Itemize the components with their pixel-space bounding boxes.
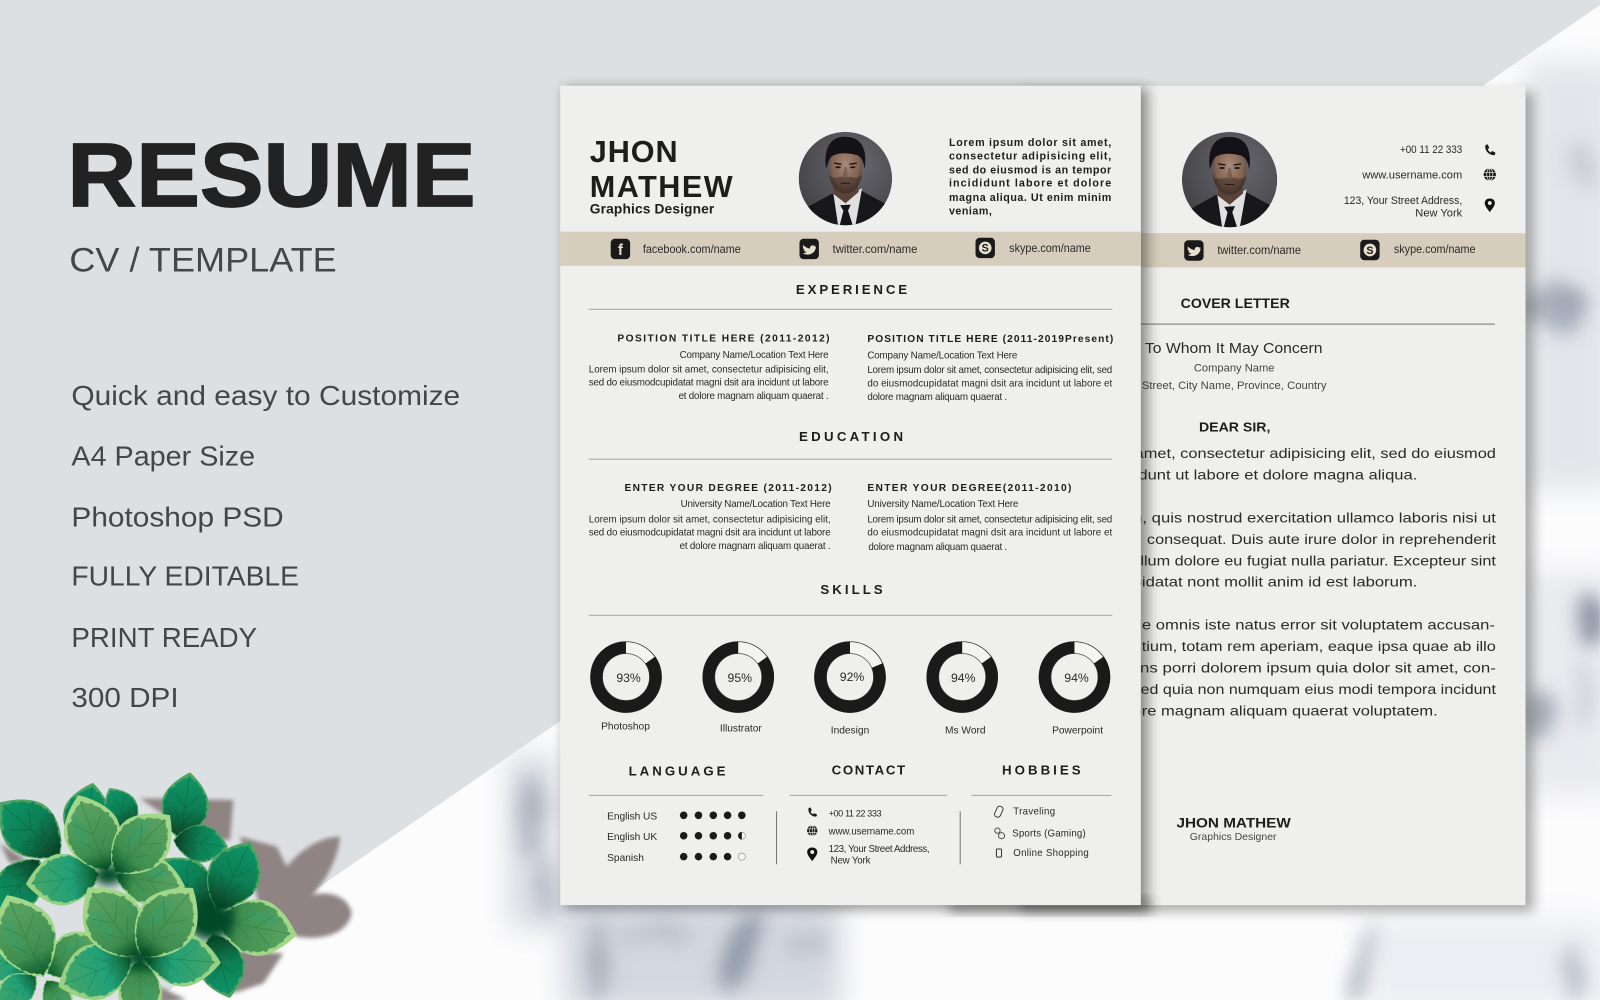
education left: Lorem ipsum dolor sit amet, consectetur adipisicing elit, (589, 514, 831, 525)
recipient: To Whom It May Concern (1145, 341, 1322, 357)
letter paragraph 3: ntium, totam rem aperiam, eaque ipsa quae ab illo (1133, 639, 1496, 655)
experience right: do eiusmodcupidatat magni dsit ara incidunt ut labore et (867, 379, 1113, 390)
experience left: sed do eiusmodcupidatat magni dsit ara incidunt ut labore (589, 378, 829, 389)
chart: ms word 94% (921, 636, 1003, 737)
portrait: resume (795, 132, 895, 229)
education right: Lorem ipsum dolor sit amet, consectetur adipisicing elit, sed (867, 514, 1112, 525)
feature: dpi: 300 DPI (71, 682, 179, 713)
hobby: traveling: Traveling (1013, 806, 1055, 817)
leaf: back right (171, 821, 230, 866)
education right: dolore magnam aliquam quaerat . (868, 542, 1007, 553)
resume sheet (560, 86, 1141, 905)
contact address (829, 844, 930, 866)
letter paragraph 1: idunt ut labore et dolore magna aliqua. (1135, 468, 1417, 484)
icon: skype (976, 238, 995, 258)
contact address: New York (1415, 207, 1463, 219)
education left: ENTER YOUR DEGREE (2011-2012) (624, 483, 832, 494)
feature: print ready: PRINT READY (71, 622, 257, 653)
experience right (867, 334, 1113, 403)
letter paragraph 1 (1135, 446, 1496, 484)
feature: customize: Quick and easy to Customize (71, 380, 460, 411)
contact address: 123, Your Street Address, (1344, 195, 1462, 207)
leaf: top cluster lower right (111, 851, 189, 911)
letter paragraph 2 (1129, 510, 1496, 591)
name (590, 135, 733, 204)
leaf: right cluster upper left (143, 841, 231, 928)
contact phone: +00 11 22 333 (1400, 144, 1462, 156)
top cluster centre shade (94, 865, 122, 885)
plant shadow (0, 798, 352, 1000)
letter paragraph 2: m, quis nostrud exercitation ullamco laboris nisi ut (1129, 510, 1496, 526)
experience right: Company Name/Location Text Here (867, 351, 1017, 362)
leaf: lower left cluster right (34, 918, 115, 993)
chart: ms word 94%: Ms Word (945, 726, 986, 737)
leaf: bottom cluster right (141, 930, 223, 989)
leaf: right cluster up (193, 830, 274, 922)
chart: illustrator 95% (697, 636, 779, 735)
heading: hobbies: HOBBIES (1002, 762, 1081, 777)
icon: facebook (611, 239, 630, 259)
letter paragraph 3: ons porri dolorem ipsum quia dolor sit amet, con- (1131, 660, 1496, 676)
icon: phone (1485, 144, 1495, 155)
leaf: back top (157, 769, 213, 844)
chart: photoshop 93%: Photoshop (601, 722, 650, 733)
bio: Lorem ipsum dolor sit amet, (949, 137, 1111, 149)
leaf: right cluster right (212, 892, 302, 963)
icon: phone (808, 807, 817, 817)
leaf: bottom cluster left (48, 931, 144, 1000)
language: spanish (607, 853, 745, 864)
leaf: lower left cluster up (0, 883, 72, 989)
leaf: lower left cluster down (34, 973, 81, 1000)
twitter handle: twitter.com/name (833, 243, 917, 256)
name: JHON (590, 135, 678, 169)
letter paragraph 3: de omnis iste natus error sit voluptatem accusan- (1133, 618, 1495, 634)
title: RESUME (67, 126, 476, 226)
experience left: et dolore magnam aliquam quaerat . (679, 391, 829, 402)
chart: powerpoint 94%: Powerpoint (1052, 726, 1103, 737)
chart: indesign 92%: 92% (840, 670, 864, 684)
leaf: lower left cluster down left (0, 963, 47, 1000)
icon: twitter (799, 239, 819, 259)
language: english uk: English UK (607, 832, 657, 843)
letter paragraph 1: amet, consectetur adipisicing elit, sed do eiusmod (1135, 446, 1496, 462)
leaf: back centre (95, 780, 148, 838)
icon: facebook: f (618, 242, 624, 259)
language: english uk (607, 832, 745, 843)
signature name: JHON MATHEW (1177, 816, 1291, 831)
chart: photoshop 93% (585, 636, 667, 733)
panel: resume page (560, 86, 1141, 905)
icon: globe (807, 825, 817, 836)
letter paragraph 2: pidatat nont mollit anim id est laborum. (1133, 575, 1417, 591)
chart: indesign 92% (811, 638, 889, 737)
education left (589, 483, 832, 552)
experience right: POSITION TITLE HERE (2011-2019Present) (867, 334, 1113, 345)
leaf: top cluster left (23, 849, 103, 910)
experience left: POSITION TITLE HERE (2011-2012) (617, 333, 830, 344)
leaf: top cluster right (94, 796, 189, 891)
bio: magna aliqua. Ut enim minim (949, 192, 1111, 204)
icon: twitter (1184, 240, 1204, 261)
leaf: back left top (57, 778, 116, 855)
contact address: 123, Your Street Address, (829, 844, 930, 855)
facebook handle: facebook.com/name (643, 243, 741, 256)
experience left: Lorem ipsum dolor sit amet, consectetur adipisicing elit, (589, 364, 829, 375)
hobby: sports: Sports (Gaming) (1012, 829, 1086, 840)
heading: cover letter: COVER LETTER (1181, 296, 1290, 311)
education left: sed do eiusmodcupidatat magni dsit ara incidunt ut labore (589, 528, 831, 539)
back page shadow (1020, 92, 1534, 911)
letter paragraph 3: sed quia non numquam eius modi tempora incidunt (1133, 682, 1496, 698)
experience right: Lorem ipsum dolor sit amet, consectetur adipisicing elit, sed (867, 365, 1112, 376)
front page shadow (564, 88, 1151, 912)
education left: University Name/Location Text Here (681, 499, 831, 510)
letter paragraph 3: ore magnam aliquam quaerat voluptatem. (1133, 703, 1438, 719)
feature: paper size: A4 Paper Size (71, 440, 255, 471)
icon: pin (1485, 198, 1495, 212)
leaf: lower left cluster left (0, 935, 40, 992)
heading: education: EDUCATION (799, 429, 903, 444)
social strip (1020, 233, 1526, 267)
company name: Company Name (1194, 362, 1275, 374)
heading: contact: CONTACT (832, 762, 905, 777)
education right (867, 483, 1113, 553)
contact web: www.username.com (1361, 170, 1462, 182)
heading: experience: EXPERIENCE (796, 282, 907, 297)
feature: editable: FULLY EDITABLE (71, 561, 299, 592)
feature: psd: Photoshop PSD (71, 502, 284, 533)
salutation: DEAR SIR, (1199, 420, 1270, 435)
education right: do eiusmodcupidatat magni dsit ara incidunt ut labore et (867, 528, 1113, 539)
language: english us (607, 811, 746, 822)
letter paragraph 3 (1131, 618, 1496, 719)
bio: consectetur adipisicing elit, (949, 151, 1111, 163)
heading: skills: SKILLS (820, 582, 883, 597)
feature list (71, 380, 460, 713)
icon: pin (807, 847, 817, 861)
contact web: www.username.com (828, 827, 914, 838)
contact address: New York (831, 855, 871, 866)
right cluster centre shade (187, 900, 233, 940)
education right: University Name/Location Text Here (867, 499, 1018, 510)
bio: sed do eiusmod is an tempor (949, 164, 1111, 176)
experience right: dolore magnam aliquam quaerat . (867, 392, 1007, 403)
bio: veniam, (949, 205, 992, 217)
contact phone: +00 11 22 333 (829, 808, 882, 818)
leaf: right cluster down (191, 928, 252, 1000)
leaf: bottom cluster down (118, 960, 162, 1000)
hobby: traveling (994, 805, 1055, 818)
portrait: cover letter (1179, 132, 1281, 231)
chart: powerpoint 94% (1033, 636, 1116, 737)
chart: indesign 92%: Indesign (831, 726, 869, 737)
chart: illustrator 95%: 95% (728, 671, 752, 685)
letter paragraph 2: consequat. Duis aute irure dolor in reprehenderit (1147, 532, 1496, 548)
social strip (560, 232, 1141, 266)
hobby: shopping: Online Shopping (1013, 848, 1089, 859)
heading: language: LANGUAGE (629, 764, 726, 779)
leaf: back left (0, 782, 78, 876)
language: spanish: Spanish (607, 853, 644, 864)
panel: cover letter page (1020, 86, 1526, 905)
education left: et dolore magnam aliquam quaerat . (680, 541, 831, 552)
experience left: Company Name/Location Text Here (680, 350, 829, 361)
name: MATHEW (590, 170, 733, 204)
chart: illustrator 95%: Illustrator (720, 724, 762, 735)
chart: ms word 94%: 94% (951, 671, 976, 685)
experience left (589, 333, 830, 402)
bio: incididunt labore et dolore (949, 178, 1111, 190)
bottom cluster centre shade (126, 948, 154, 968)
skype handle: skype.com/name (1009, 242, 1091, 255)
role: Graphics Designer (590, 201, 715, 216)
plant (0, 769, 302, 1000)
leaf: lower left back (0, 846, 58, 926)
contact address (1344, 195, 1463, 219)
cover letter sheet (1020, 86, 1526, 905)
bio (949, 137, 1111, 217)
subtitle: CV / TEMPLATE (69, 241, 337, 279)
leaf: top cluster up (52, 785, 133, 881)
twitter handle: twitter.com/name (1217, 244, 1301, 257)
signature role: Graphics Designer (1190, 832, 1277, 843)
skype handle: skype.com/name (1394, 243, 1476, 256)
icon: skype (1360, 240, 1380, 260)
letter paragraph 2: illum dolore eu fugiat nulla pariatur. Excepteur sint (1137, 553, 1496, 569)
icon: globe (1484, 168, 1496, 181)
chart: photoshop 93%: 93% (616, 671, 641, 685)
address line: Street, City Name, Province, Country (1142, 380, 1327, 392)
leaf: bottom cluster upper left (64, 869, 164, 975)
leaf: bottom cluster upper right (116, 870, 217, 975)
education right: ENTER YOUR DEGREE(2011-2010) (867, 483, 1071, 494)
chart: powerpoint 94%: 94% (1064, 671, 1089, 685)
language: english us: English US (607, 811, 657, 822)
